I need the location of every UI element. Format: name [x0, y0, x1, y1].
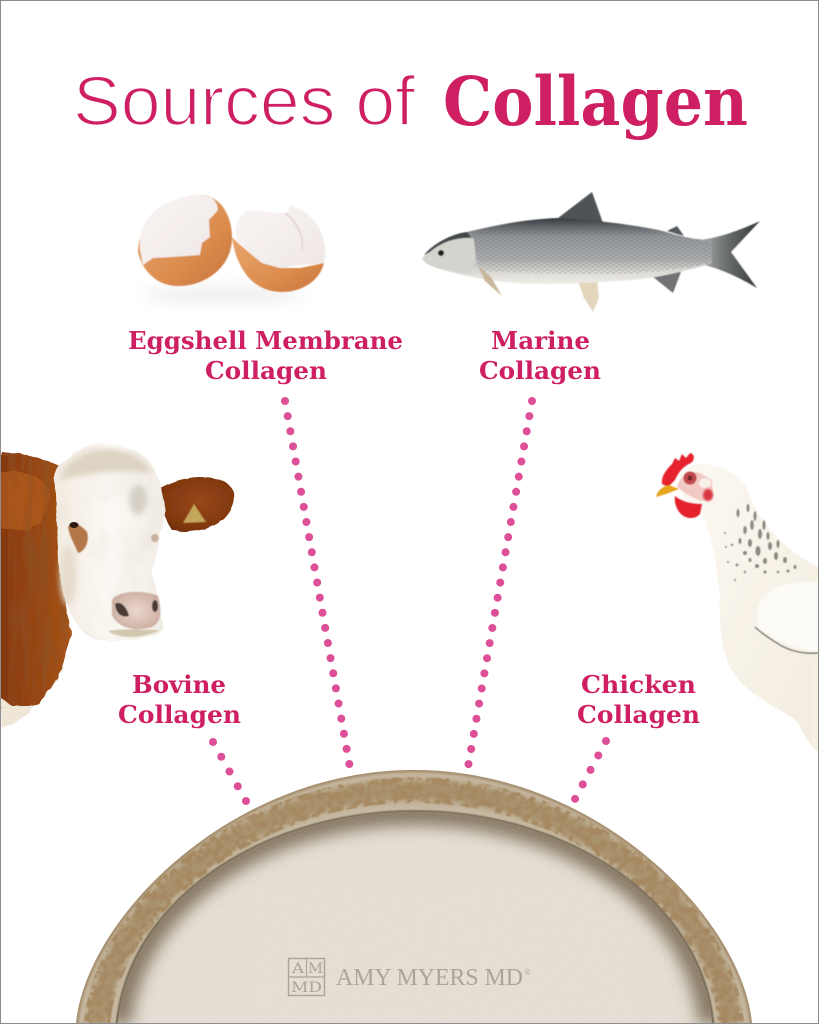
white chest patch: [1, 698, 34, 727]
ear left edge fill: [1, 476, 8, 526]
label: eggshell membrane collagen: [128, 326, 403, 385]
title: Sources of: [73, 62, 416, 140]
forelock and forehead shading: [60, 449, 152, 605]
powder: [118, 812, 712, 1023]
label: bovine collagen: Bovine: [132, 670, 226, 699]
tail: [700, 221, 760, 288]
label: eggshell membrane collagen: Eggshell Membrane: [128, 326, 403, 355]
logo mark: M: [308, 961, 323, 977]
body: [422, 218, 712, 284]
label: chicken collagen: [577, 670, 700, 729]
label: marine collagen: Collagen: [479, 356, 601, 385]
neck speckles: [724, 504, 796, 581]
label: eggshell membrane collagen: Collagen: [205, 356, 327, 385]
title: Collagen: [443, 62, 748, 141]
logo: Amy Myers MD: ®: [524, 967, 531, 977]
dotted connector: chicken: [575, 741, 606, 799]
logo: Amy Myers MD: AMY MYERS MD: [336, 965, 523, 991]
head: [55, 444, 165, 641]
bowl rim: [76, 770, 752, 1024]
comb: [662, 453, 694, 487]
back fins: [558, 192, 684, 312]
dotted connector: bovine: [213, 742, 246, 801]
icon: eggshells: [138, 195, 325, 303]
muzzle: [108, 592, 160, 637]
dotted connector: marine: [468, 401, 532, 767]
left eggshell: [138, 195, 232, 286]
label: chicken collagen: Collagen: [577, 700, 700, 729]
label: marine collagen: [479, 326, 601, 385]
icon: fish: [422, 192, 760, 312]
label: chicken collagen: Chicken: [581, 670, 696, 699]
title: [73, 62, 748, 141]
logo mark: [288, 958, 324, 996]
wattle: [675, 496, 702, 518]
face: [677, 472, 713, 501]
logo mark: MD: [291, 980, 322, 996]
pectoral fin: [478, 266, 502, 296]
icon: cow: [1, 444, 234, 727]
right ear: [157, 477, 234, 532]
beak: [656, 485, 679, 497]
logo mark: A: [291, 961, 305, 977]
head: [422, 232, 476, 274]
logo: Amy Myers MD: [288, 958, 531, 996]
label: bovine collagen: [118, 670, 241, 729]
right eggshell: [232, 205, 325, 292]
bowl of collagen powder: [76, 770, 752, 1024]
icon: chicken: [656, 453, 818, 752]
label: marine collagen: Marine: [491, 326, 590, 355]
chicken body: [680, 464, 818, 752]
neck left edge fill: [1, 456, 8, 706]
label: bovine collagen: Collagen: [118, 700, 241, 729]
body right edge fill: [812, 572, 818, 747]
left ear: [1, 471, 50, 530]
eye patch: [68, 523, 88, 553]
cow neck: [1, 451, 72, 712]
wing: [757, 582, 818, 652]
dotted connector: eggshell: [285, 401, 350, 768]
